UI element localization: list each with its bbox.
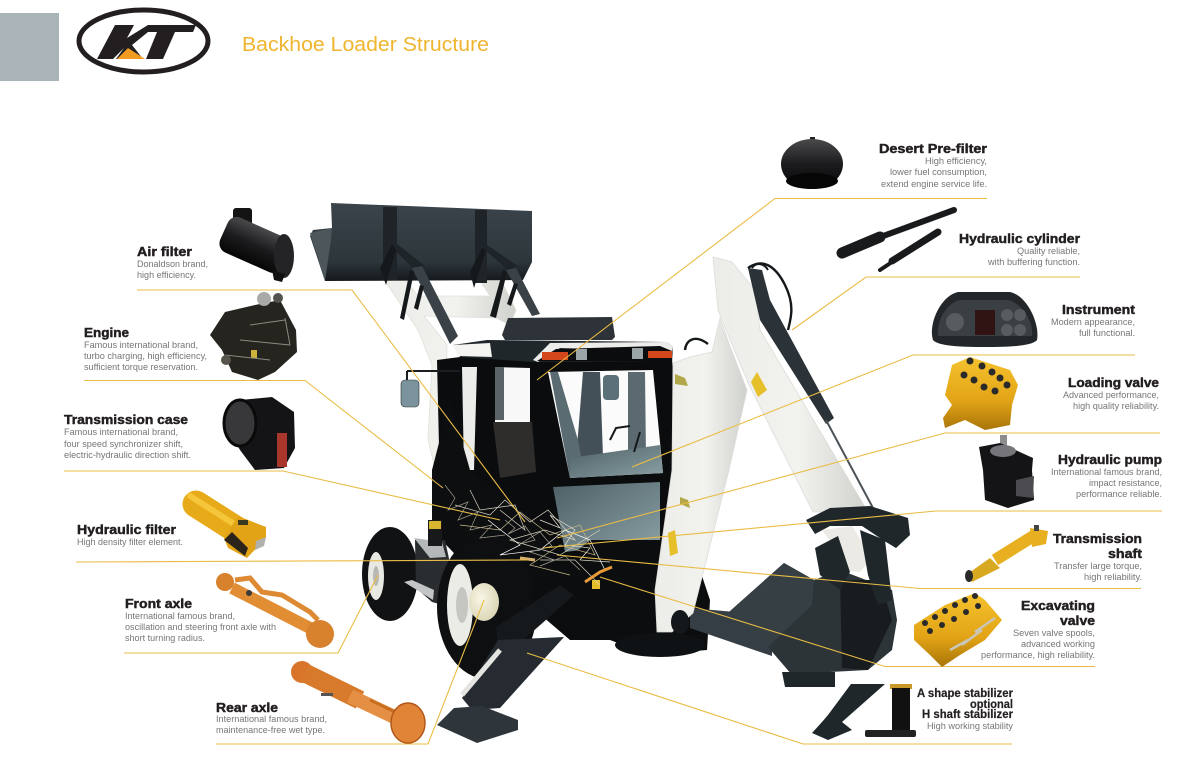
stabilizer text: optional xyxy=(970,699,1013,711)
hydraulic cylinder text: Hydraulic cylinder xyxy=(959,232,1080,246)
loader bucket xyxy=(310,203,532,288)
icon: desert pre-filter xyxy=(781,137,843,189)
icon: hydraulic cylinders xyxy=(842,210,954,270)
icon: hydraulic filter xyxy=(190,496,266,558)
hydraulic filter text: High density filter element. xyxy=(77,537,183,547)
engine text xyxy=(84,326,207,372)
panel: hydraulic filter xyxy=(77,496,266,558)
panel: engine xyxy=(84,292,297,380)
transmission case text: Famous international brand, xyxy=(64,427,178,437)
instrument text: Modern appearance, xyxy=(1051,317,1135,327)
leader lines xyxy=(64,198,1162,744)
icon: front axle xyxy=(216,573,334,648)
icon: rear axle xyxy=(291,661,425,743)
header gray block xyxy=(0,13,59,81)
icon: instrument cluster xyxy=(932,292,1037,347)
door window xyxy=(553,482,660,552)
instrument text xyxy=(1051,303,1136,338)
panel: air filter xyxy=(137,208,294,282)
side mirror xyxy=(401,371,460,407)
panel: desert pre-filter xyxy=(781,137,987,189)
chassis side and steps xyxy=(404,520,460,610)
rear axle text: maintenance-free wet type. xyxy=(216,725,325,735)
transmission shaft text: Transmission xyxy=(1053,532,1142,546)
panel: loading valve xyxy=(943,357,1159,430)
desert pre-filter text: Desert Pre-filter xyxy=(879,142,987,156)
transmission shaft text: shaft xyxy=(1108,547,1143,561)
hydraulic cylinder text: with buffering function. xyxy=(987,257,1080,267)
panel: instrument xyxy=(932,292,1136,347)
hydraulic pump text: Hydraulic pump xyxy=(1058,453,1162,467)
cab xyxy=(437,340,688,620)
panel: transmission shaft xyxy=(965,525,1143,582)
engine text: Engine xyxy=(84,326,129,340)
panel: transmission case xyxy=(64,397,295,470)
icon: loading valve xyxy=(943,357,1018,430)
desert pre-filter text xyxy=(879,142,987,189)
engine text: turbo charging, high efficiency, xyxy=(84,351,207,361)
panel: front axle xyxy=(125,573,334,648)
excavating valve text: Seven valve spools, xyxy=(1013,628,1095,638)
icon: air filter xyxy=(216,208,294,282)
air filter text xyxy=(137,245,208,280)
hydraulic pump text: International famous brand, xyxy=(1051,467,1162,477)
side window xyxy=(462,367,536,478)
panel: hydraulic pump xyxy=(979,435,1162,508)
boom main leg xyxy=(655,318,747,634)
icon: A shape stabilizer xyxy=(812,684,885,740)
rear window xyxy=(548,370,663,478)
hydraulic pump text: impact resistance, xyxy=(1089,478,1162,488)
loader cylinders and struts xyxy=(400,266,540,344)
transmission shaft text: high reliability. xyxy=(1084,572,1142,582)
excavating valve text: valve xyxy=(1060,614,1095,628)
transmission shaft text xyxy=(1053,532,1143,582)
hydraulic filter text xyxy=(77,523,183,547)
front axle text xyxy=(125,597,276,643)
roof air pack xyxy=(502,317,615,340)
boom dipper bracket xyxy=(806,506,910,605)
icon: hydraulic pump xyxy=(979,435,1034,508)
hydraulic pump text xyxy=(1051,453,1162,499)
rear axle text xyxy=(216,701,327,735)
hydraulic filter text: Hydraulic filter xyxy=(77,523,176,537)
desert pre-filter text: High efficiency, xyxy=(925,156,987,166)
icon: transmission case xyxy=(224,397,295,470)
excavating valve text xyxy=(981,599,1095,660)
air filter text: Air filter xyxy=(137,245,192,259)
excavating valve text: Excavating xyxy=(1021,599,1095,613)
transmission shaft text: Transfer large torque, xyxy=(1054,561,1142,571)
stabilizer text: A shape stabilizer xyxy=(917,688,1014,700)
front wheel xyxy=(362,527,418,621)
boom dipper arm xyxy=(713,257,873,512)
icon: H shaft stabilizer xyxy=(865,684,916,737)
backhoe bucket xyxy=(729,563,897,687)
instrument text: Instrument xyxy=(1062,303,1136,317)
loading valve text: Loading valve xyxy=(1068,376,1159,390)
hydraulic pump text: performance reliable. xyxy=(1076,489,1162,499)
rear axle text: International famous brand, xyxy=(216,714,327,724)
main machine: backhoe loader xyxy=(310,203,910,743)
panel: rear axle xyxy=(216,661,425,743)
title: Backhoe Loader Structure xyxy=(242,34,489,56)
loading valve text xyxy=(1063,376,1159,411)
panel: hydraulic cylinder xyxy=(842,210,1080,270)
air filter text: high efficiency. xyxy=(137,270,196,280)
loader arms xyxy=(383,278,516,480)
icon: excavating valve xyxy=(914,593,1002,667)
front axle text: short turning radius. xyxy=(125,633,205,643)
transmission case text: four speed synchronizer shift, xyxy=(64,439,183,449)
stabilizer cylinder and leg xyxy=(437,585,574,743)
stabilizer text: H shaft stabilizer xyxy=(922,709,1014,721)
rear axle text: Rear axle xyxy=(216,701,278,715)
loading valve text: high quality reliability. xyxy=(1073,401,1159,411)
hydraulic cylinder text xyxy=(959,232,1080,267)
air filter text: Donaldson brand, xyxy=(137,259,208,269)
transmission case text xyxy=(64,413,191,460)
panel: excavating valve xyxy=(914,593,1095,667)
KT logo xyxy=(79,10,208,72)
cab roof xyxy=(453,340,673,362)
excavating valve text: performance, high reliability. xyxy=(981,650,1095,660)
transmission case text: Transmission case xyxy=(64,413,188,427)
panel: stabilizer xyxy=(812,684,1014,740)
stabilizer text: High working stability xyxy=(927,721,1013,731)
excavating valve text: advanced working xyxy=(1021,639,1095,649)
wiring harness xyxy=(445,485,612,585)
front engine bay xyxy=(432,400,560,590)
engine text: sufficient torque reservation. xyxy=(84,362,198,372)
instrument text: full functional. xyxy=(1079,328,1135,338)
engine text: Famous international brand, xyxy=(84,340,198,350)
front axle text: International famous brand, xyxy=(125,611,235,621)
icon: transmission shaft xyxy=(965,525,1048,582)
rear wheel xyxy=(437,535,537,679)
rear frame xyxy=(530,540,772,657)
desert pre-filter text: lower fuel consumption, xyxy=(890,167,987,177)
icon: engine xyxy=(210,292,297,380)
desert pre-filter text: extend engine service life. xyxy=(881,179,987,189)
front axle text: oscillation and steering front axle with xyxy=(125,622,276,632)
loading valve text: Advanced performance, xyxy=(1063,390,1159,400)
front axle text: Front axle xyxy=(125,597,192,611)
transmission case text: electric-hydraulic direction shift. xyxy=(64,450,191,460)
stabilizer text xyxy=(917,688,1014,731)
hydraulic cylinder text: Quality reliable, xyxy=(1017,246,1080,256)
